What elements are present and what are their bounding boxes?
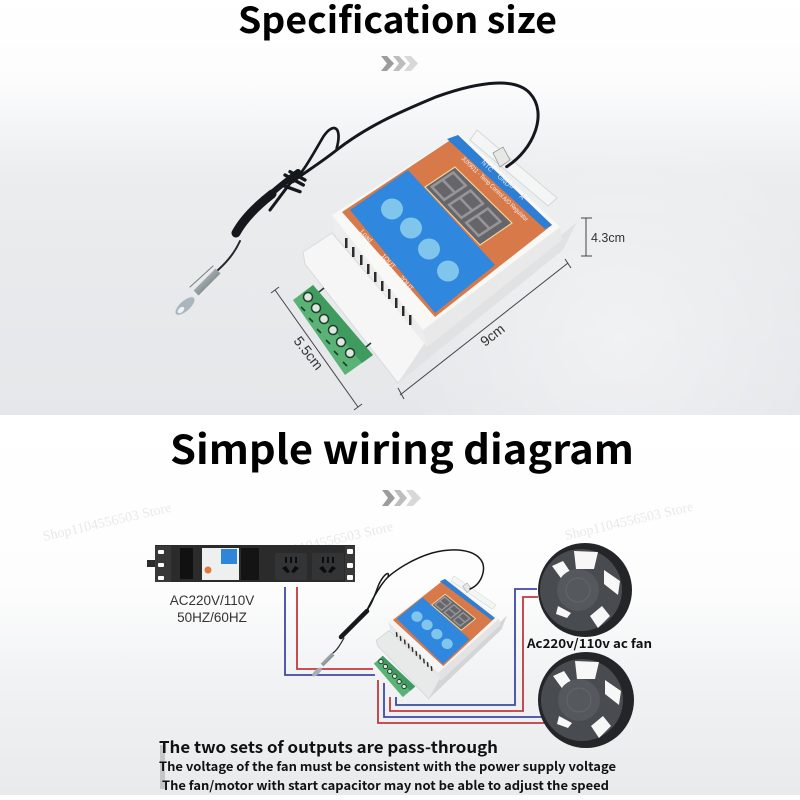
case top (384, 574, 504, 676)
icon: chevron arrows bottom (382, 490, 421, 506)
case side (423, 227, 562, 347)
wiring: input and output wires (285, 587, 545, 723)
power supply label: 50HZ/60HZ (177, 610, 247, 625)
panel labels: Load (359, 229, 374, 244)
chart: device wiring view (365, 572, 515, 703)
terminal block (293, 285, 373, 375)
title: simple wiring diagram: Simple wiring diagram (170, 418, 634, 476)
notes text block (159, 734, 616, 794)
terminal block (373, 653, 416, 699)
buttons (411, 609, 453, 652)
panel: wiring background (0, 415, 800, 795)
vents (345, 238, 412, 325)
dimension: 9cm: 9cm (477, 320, 508, 349)
power supply label (170, 593, 254, 625)
watermarks: Shop1104556503 Store (42, 501, 173, 545)
notes text block: The voltage of the fan must be consistent with the power supply voltage (159, 756, 616, 775)
icon: power distribution strip (147, 545, 355, 582)
case left wall (332, 215, 427, 347)
dimension: 9cm (398, 259, 571, 399)
base rail right face (398, 222, 577, 383)
watermarks: Shop1104556503 Store (564, 500, 695, 544)
panel: specification background (0, 0, 800, 415)
base rail right face (420, 616, 515, 699)
panel labels: NTC (480, 159, 494, 174)
watermarks: Shop1104556503 Store (264, 520, 395, 564)
chart: device top view (293, 130, 577, 383)
panel labels: B (508, 182, 516, 190)
icon: small temperature sensor cable (311, 550, 484, 678)
dimension: 4.3cm: 4.3cm (591, 231, 625, 245)
case left wall (388, 618, 441, 684)
display (425, 167, 512, 245)
power supply label: AC220V/110V (170, 593, 254, 608)
panel labels: GND (496, 173, 511, 189)
notes text block: The fan/motor with start capacitor may not be able to adjust the speed (162, 775, 609, 794)
panel labels: 1OUT (380, 253, 396, 270)
face panel (389, 575, 500, 670)
case top (332, 133, 560, 330)
icon: top fan (538, 543, 632, 637)
icon: bottom fan (538, 652, 634, 748)
dimension: 5.5cm (271, 287, 362, 410)
dimension: 4.3cm (581, 218, 625, 256)
notes text block: The two sets of outputs are pass-through (159, 734, 498, 758)
panel labels (359, 155, 530, 292)
face panel (342, 135, 552, 317)
base rail left face (375, 627, 443, 703)
connector block (450, 573, 496, 612)
dimension: 5.5cm: 5.5cm (291, 333, 327, 373)
buttons (381, 198, 459, 282)
fan label: Ac220v/110v ac fan (526, 633, 652, 652)
case side (433, 619, 506, 681)
display (431, 592, 477, 632)
panel labels: JUX9011 - Temp Control A/O Regulator (460, 155, 530, 223)
base rail left face (303, 233, 428, 383)
panel labels: 2OUT (398, 275, 414, 292)
icon: chevron arrows top (381, 56, 418, 71)
watermarks (42, 500, 695, 564)
vents (396, 630, 433, 673)
icon: temperature sensor and cable (173, 83, 538, 318)
panel labels: A (518, 193, 526, 202)
connector block (470, 130, 557, 206)
